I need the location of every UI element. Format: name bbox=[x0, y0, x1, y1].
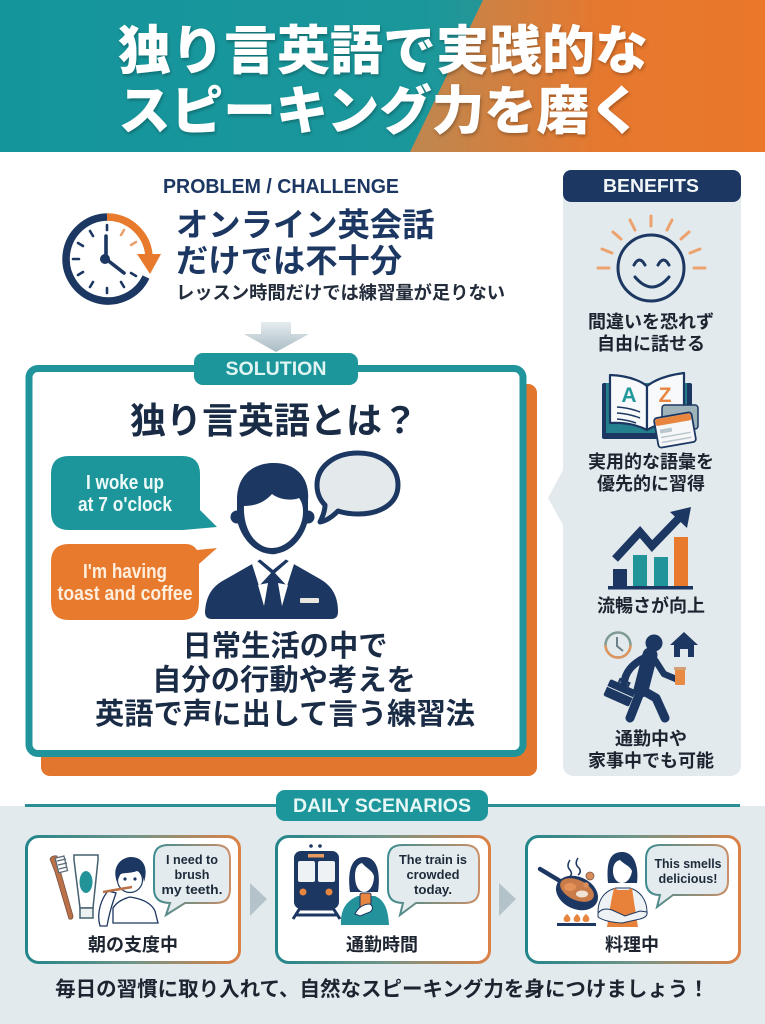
arrow: problem to solution bbox=[244, 322, 309, 352]
bubble: smell: delicious! bbox=[658, 871, 718, 886]
scenarios tag bbox=[276, 790, 488, 821]
icon: toothpaste bbox=[74, 855, 98, 918]
icon: commuter bbox=[603, 632, 698, 718]
benefit 2 text: 優先的に習得 bbox=[597, 474, 705, 494]
solution tag bbox=[194, 353, 358, 385]
benefit 4 text: 家事中でも可能 bbox=[588, 751, 714, 771]
solution tag: SOLUTION bbox=[226, 359, 326, 380]
icon: frying pan bbox=[540, 858, 604, 926]
speech bubble: teal: I woke up bbox=[86, 472, 164, 494]
bubble: brush: I need to bbox=[166, 852, 218, 867]
benefit 2 text: 実用的な語彙を bbox=[588, 452, 714, 472]
speech bubble: teal: at 7 o'clock bbox=[78, 494, 173, 516]
caption: commute: 通勤時間 bbox=[346, 935, 418, 955]
icon: book and cards: Z bbox=[659, 384, 672, 407]
solution description: 日常生活の中で bbox=[182, 630, 388, 663]
speech bubble: orange: toast and coffee bbox=[58, 583, 192, 605]
icon: growth chart bbox=[608, 507, 693, 590]
closing message: 毎日の習慣に取り入れて、自然なスピーキング力を身につけましょう！ bbox=[55, 977, 709, 1001]
benefit 1 text: 間違いを恐れず bbox=[588, 312, 714, 332]
icon: book and cards bbox=[602, 373, 698, 448]
speech bubble: teal bbox=[51, 456, 217, 530]
bubble: smell: This smells bbox=[654, 856, 722, 871]
orange offset card bbox=[41, 384, 537, 776]
icon: train bbox=[293, 844, 340, 919]
problem heading bbox=[176, 207, 434, 279]
icon: clock with arrow bbox=[66, 217, 161, 301]
icon: woman with phone bbox=[341, 857, 389, 925]
panel: benefits bbox=[548, 170, 741, 776]
benefit 1 text: 自由に話せる bbox=[597, 334, 705, 354]
card: morning bbox=[26, 836, 240, 962]
icon: toothbrush bbox=[50, 856, 73, 919]
benefit 1 text bbox=[588, 312, 714, 354]
bubble: train bbox=[388, 845, 479, 915]
problem heading: オンライン英会話 bbox=[176, 207, 434, 243]
bubble: brush bbox=[154, 845, 230, 915]
icon: boy brushing bbox=[99, 857, 158, 926]
title: 独り言英語で実践的な bbox=[118, 22, 648, 81]
solution description: 自分の行動や考えを bbox=[152, 664, 416, 697]
problem subtext: レッスン時間だけでは練習量が足りない bbox=[176, 282, 505, 303]
benefit 4 text: 通勤中や bbox=[615, 729, 687, 749]
icon: businessman bbox=[205, 463, 338, 619]
benefit 4 text bbox=[588, 729, 714, 771]
problem heading: だけでは不十分 bbox=[176, 243, 402, 279]
title bbox=[118, 22, 648, 141]
title: スピーキング力を磨く bbox=[118, 82, 642, 141]
arrow: next bbox=[499, 883, 516, 916]
speech bubble: orange: I'm having bbox=[83, 561, 167, 583]
bubble: brush: brush bbox=[174, 867, 210, 882]
benefit 3 text: 流暢さが向上 bbox=[597, 595, 705, 616]
benefit 2 text bbox=[588, 452, 714, 494]
solution description: 英語で声に出して言う練習法 bbox=[95, 698, 475, 731]
bubble: train: today. bbox=[414, 882, 452, 897]
bubble: train: crowded bbox=[406, 867, 460, 882]
bubble: train: The train is bbox=[399, 852, 467, 867]
header banner bbox=[0, 0, 765, 152]
empty thought bubble bbox=[317, 453, 398, 522]
panel: problem bbox=[66, 176, 505, 303]
bubble: smell bbox=[646, 845, 728, 907]
caption: cooking: 料理中 bbox=[605, 935, 659, 955]
solution description bbox=[95, 630, 475, 731]
icon: book and cards: A bbox=[621, 384, 637, 407]
card: cooking bbox=[526, 836, 740, 962]
arrow: next bbox=[250, 883, 267, 916]
card: commute bbox=[276, 836, 490, 962]
benefits heading bbox=[563, 170, 741, 202]
solution card bbox=[29, 368, 523, 754]
scenarios tag: DAILY SCENARIOS bbox=[293, 796, 471, 817]
icon: smiley bbox=[598, 216, 705, 301]
panel: daily scenarios bbox=[0, 790, 765, 1024]
panel: solution bbox=[29, 353, 537, 776]
benefits heading: BENEFITS bbox=[603, 176, 699, 196]
problem label: PROBLEM / CHALLENGE bbox=[163, 176, 399, 198]
speech bubble: orange bbox=[51, 544, 217, 620]
icon: woman cooking bbox=[598, 852, 647, 927]
caption: morning: 朝の支度中 bbox=[88, 935, 178, 955]
bubble: brush: my teeth. bbox=[162, 882, 222, 897]
solution heading: 独り言英語とは？ bbox=[130, 400, 418, 441]
